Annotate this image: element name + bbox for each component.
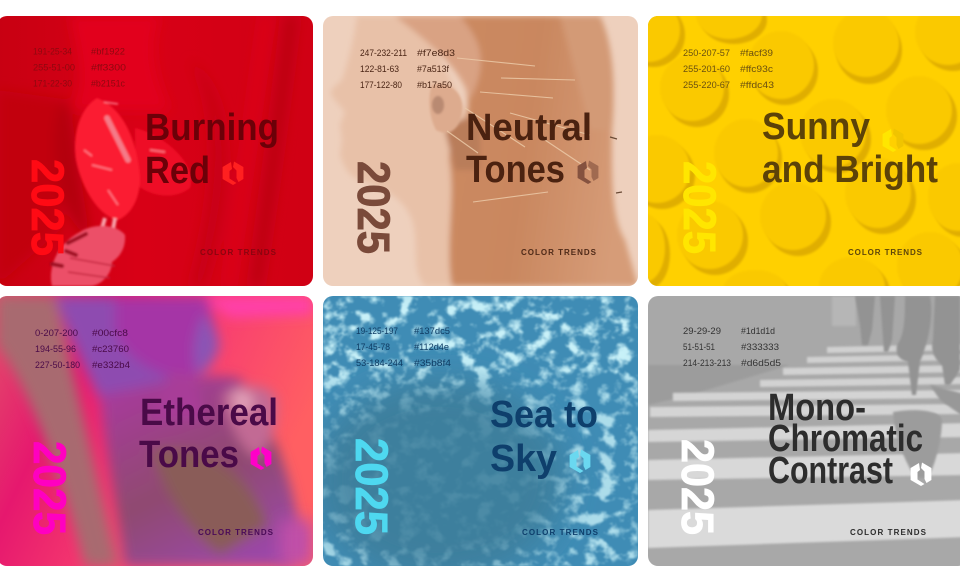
palette values: 255-220-67 — [683, 80, 730, 90]
palette values — [35, 328, 130, 370]
hair band — [0, 296, 118, 566]
heading: Sea to — [490, 394, 598, 436]
heading — [139, 392, 278, 476]
palette values: 171-22-30 — [33, 78, 72, 88]
hands — [222, 386, 276, 458]
pillar — [832, 296, 856, 326]
palette values: 250-207-57 — [683, 48, 730, 58]
palette values: #ffc93c — [740, 64, 774, 74]
bobby pins — [447, 58, 590, 202]
long shadow — [893, 410, 942, 478]
year: 2025 — [24, 441, 75, 535]
year: 2025 — [346, 438, 397, 535]
palette values: 0-207-200 — [35, 328, 78, 338]
palette values: 214-213-213 — [683, 358, 731, 368]
palette values: #112d4e — [414, 342, 449, 352]
heading: Contrast — [768, 450, 893, 492]
heading: Red — [145, 150, 210, 192]
ear — [429, 84, 462, 133]
panel: Sea to Sky — [315, 296, 638, 580]
label: COLOR TRENDS — [848, 248, 923, 257]
palette values: 17-45-78 — [356, 342, 390, 352]
heading: Mono- — [768, 387, 866, 429]
heading — [490, 394, 598, 480]
palette values: #d6d5d5 — [741, 358, 781, 368]
palette values — [356, 326, 451, 368]
palette values: #00cfc8 — [92, 328, 128, 338]
year: 2025 — [674, 161, 725, 254]
raised arm — [50, 296, 173, 402]
palette values: 19-125-197 — [356, 326, 398, 336]
photo: lemons on yellow — [648, 16, 960, 286]
palette values: #c23760 — [92, 344, 129, 354]
year: 2025 — [22, 159, 73, 256]
heading — [145, 107, 279, 192]
heading: Tones — [139, 434, 239, 476]
icon: logo hexagon — [883, 128, 903, 152]
palette values: #333333 — [741, 342, 779, 352]
year: 2025 — [672, 439, 723, 535]
label: COLOR TRENDS — [198, 528, 274, 537]
photo: woman's profile with red hair and bobby pins — [323, 16, 638, 286]
icon: logo hexagon — [911, 462, 931, 486]
palette values: #7a513f — [417, 64, 449, 74]
palette values — [360, 48, 455, 90]
heading: Tones — [466, 149, 565, 191]
palette values — [683, 326, 781, 368]
palette values: #b17a50 — [417, 80, 452, 90]
heading: Neutral — [466, 107, 592, 149]
palette values: #1d1d1d — [741, 326, 775, 336]
heading — [768, 387, 923, 492]
heading: Sky — [490, 438, 557, 480]
palette values: 122-81-63 — [360, 64, 399, 74]
heading — [762, 106, 938, 191]
palette values: #137dc5 — [414, 326, 450, 336]
pedestrians — [855, 296, 960, 478]
year: 2025 — [348, 161, 399, 254]
palette values: #f7e8d3 — [417, 48, 455, 58]
heading: and Bright — [762, 149, 938, 191]
back petal — [135, 128, 191, 196]
hair — [446, 16, 638, 286]
label: COLOR TRENDS — [521, 248, 597, 257]
photo: crosswalk with pedestrians — [648, 296, 960, 566]
panel: Mono-Chromatic Contrast — [648, 296, 960, 566]
head — [115, 296, 219, 378]
label: COLOR TRENDS — [522, 528, 599, 537]
palette values: 177-122-80 — [360, 80, 402, 90]
panel: Sunny and Bright — [648, 16, 960, 286]
icon: logo hexagon — [570, 450, 590, 473]
heading: Sunny — [762, 106, 870, 148]
palette values: #ff3300 — [91, 62, 126, 72]
palette values — [683, 48, 774, 90]
label: COLOR TRENDS — [200, 248, 277, 257]
palette values: #35b8f4 — [414, 358, 451, 368]
photo: blue foliage texture — [315, 296, 638, 580]
palette values: #ffdc43 — [740, 80, 774, 90]
icon: logo hexagon — [223, 162, 243, 185]
label: COLOR TRENDS — [850, 528, 927, 537]
palette values: 191-25-34 — [33, 46, 72, 56]
hand — [51, 226, 125, 286]
palette values: 227-50-180 — [35, 360, 80, 370]
palette values: 53-184-244 — [356, 358, 403, 368]
face and neck — [331, 16, 470, 286]
palette values: 194-55-96 — [35, 344, 76, 354]
panel: Neutral Tones — [323, 16, 638, 286]
icon: logo hexagon — [578, 160, 598, 184]
lemons — [648, 16, 960, 286]
palette values: 247-232-211 — [360, 48, 407, 58]
heading — [466, 107, 592, 191]
photo: woman in gradient duotone — [0, 296, 313, 566]
palette values: 51-51-51 — [683, 342, 715, 352]
body — [100, 376, 300, 566]
crosswalk stripes — [827, 344, 960, 353]
panel: Ethereal Tones — [0, 296, 313, 566]
palette values: #e332b4 — [92, 360, 130, 370]
heading: Chromatic — [768, 418, 923, 460]
shoulder neck — [159, 388, 202, 421]
palette values: 255-201-60 — [683, 64, 730, 74]
palette values: #facf39 — [740, 48, 773, 58]
photo: red drape with anthurium flower and hand — [0, 16, 313, 286]
front petal — [75, 98, 140, 220]
shadow area — [648, 365, 790, 405]
palette values: #b2151c — [91, 78, 125, 88]
heading: Ethereal — [140, 392, 278, 434]
heading: Burning — [145, 107, 279, 149]
icon: logo hexagon — [251, 446, 271, 470]
lemon shadows — [648, 16, 960, 286]
palette values: 255-51-00 — [33, 62, 75, 72]
palette values — [33, 46, 126, 88]
palette values: #bf1922 — [91, 46, 125, 56]
panel: Burning Red — [0, 16, 313, 286]
palette values: 29-29-29 — [683, 326, 721, 336]
